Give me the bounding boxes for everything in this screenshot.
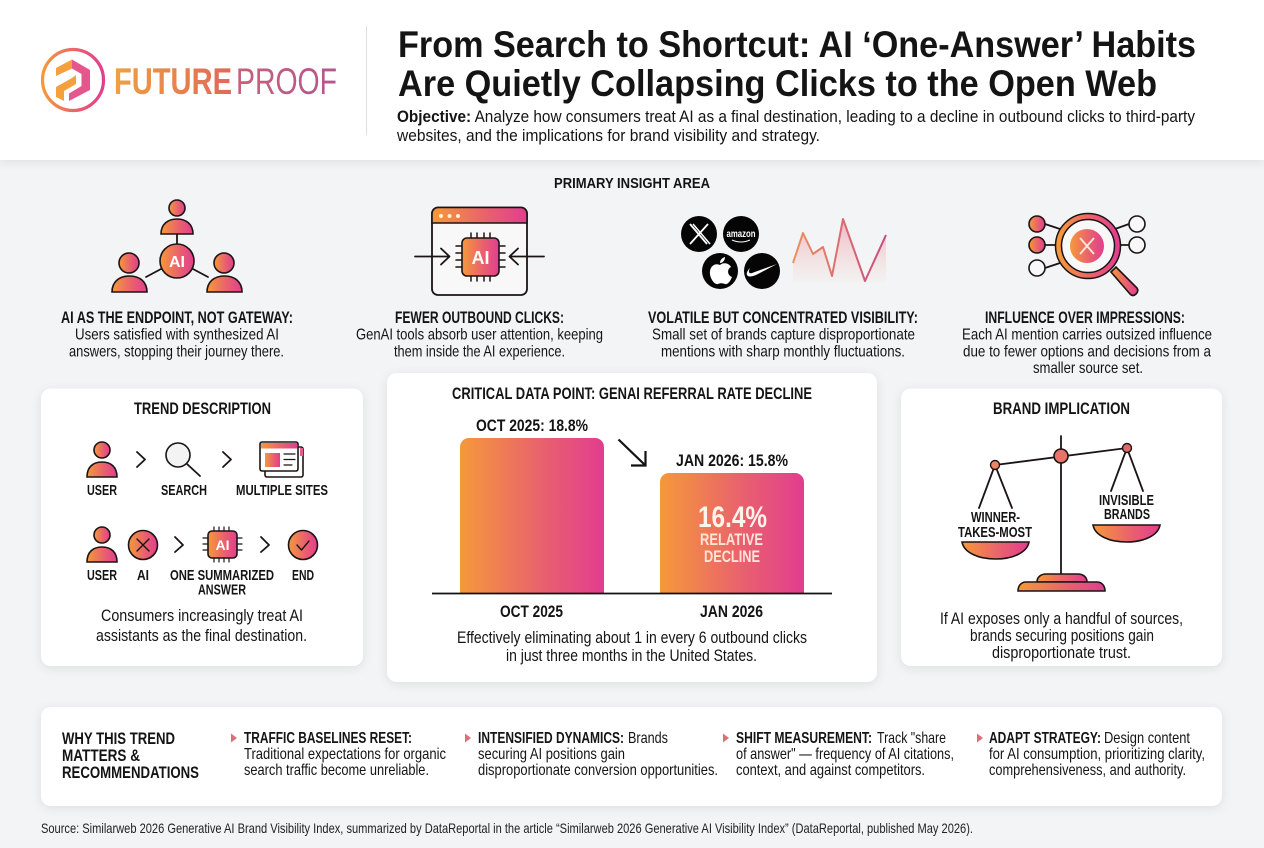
- insight 4: influence over impressions: [962, 214, 1212, 377]
- recommendation: adapt strategy: ADAPT STRATEGY:: [989, 730, 1101, 747]
- source note: Source: Similarweb 2026 Generative AI Brand Visibility Index, summarized by DataReportal in the article “Similarweb 2026 Generative AI Visibility Index” (DataReportal, published May 2026).: [41, 820, 973, 836]
- logo: FutureProof: FUTURE: [114, 61, 232, 102]
- insight 2 text: GenAI tools absorb user attention, keeping: [356, 326, 603, 344]
- panel: trend description: [41, 388, 363, 666]
- panel: why this trend matters: [41, 707, 1222, 806]
- icon: magnifier with nodes: [1029, 214, 1145, 296]
- recommendation: intensified dynamics: disproportionate conversion opportunities.: [478, 762, 718, 779]
- insight 3 text: mentions with sharp monthly fluctuations.: [661, 344, 905, 360]
- insight 3 text: [648, 309, 918, 360]
- insight 1 text: answers, stopping their journey there.: [69, 344, 284, 360]
- callout: relative decline: [698, 501, 767, 566]
- bar chart: OCT 2025: [500, 603, 563, 621]
- trend description text: Consumers increasingly treat AI: [101, 606, 303, 625]
- brand implication text: [940, 609, 1183, 662]
- panel: brand implication: [901, 388, 1222, 666]
- insight 2 text: [356, 309, 603, 360]
- insight 3 text: VOLATILE BUT CONCENTRATED VISIBILITY:: [648, 309, 918, 327]
- flow: AI one-answer: USER: [87, 567, 117, 584]
- icon: brand logos: amazon: [726, 229, 756, 240]
- callout: relative decline: 16.4%: [698, 501, 767, 534]
- section heading: primary insight area: PRIMARY INSIGHT AREA: [554, 175, 710, 192]
- chart: volatile sparkline: [793, 219, 886, 283]
- recommendation: shift measurement: SHIFT MEASUREMENT:: [736, 730, 872, 747]
- heading: why this trend matters and recommendations: MATTERS &: [62, 747, 140, 765]
- heading: critical data point: CRITICAL DATA POINT: GENAI REFERRAL RATE DECLINE: [452, 385, 812, 403]
- insight 3: volatile but concentrated visibility: [648, 216, 918, 360]
- insight 1 text: [61, 309, 293, 360]
- recommendation: traffic baselines reset: [231, 730, 446, 779]
- flow: traditional search: [87, 442, 328, 499]
- recommendation: intensified dynamics: Brands: [628, 730, 668, 747]
- heading: why this trend matters and recommendations: [62, 730, 199, 782]
- callout: relative decline: DECLINE: [704, 547, 760, 566]
- recommendation: traffic baselines reset: search traffic become unreliable.: [244, 762, 429, 779]
- heading: why this trend matters and recommendations: RECOMMENDATIONS: [62, 764, 199, 782]
- flow: traditional search: USER: [87, 482, 117, 499]
- heading: trend description: TREND DESCRIPTION: [134, 400, 271, 418]
- insight 1 text: Users satisfied with synthesized AI: [75, 326, 279, 344]
- icon: browser window with AI chip: [415, 208, 544, 295]
- recommendation: shift measurement: of answer" — frequency of AI citations,: [736, 746, 954, 763]
- icon: balance scale: TAKES-MOST: [958, 524, 1032, 541]
- recommendation: shift measurement: [723, 730, 954, 779]
- critical data text: in just three months in the United States.: [506, 646, 757, 665]
- icon: users connected to AI: AI: [169, 254, 185, 271]
- flow: traditional search: SEARCH: [161, 482, 207, 499]
- flow: AI one-answer: ANSWER: [198, 582, 246, 598]
- objective text: websites, and the implications for brand visibility and strategy.: [396, 126, 820, 145]
- insight 4 text: INFLUENCE OVER IMPRESSIONS:: [985, 309, 1185, 327]
- flow: traditional search: MULTIPLE SITES: [236, 482, 328, 499]
- bar chart: OCT 2025: 18.8%: [476, 417, 588, 435]
- recommendation: shift measurement: context, and against competitors.: [736, 762, 925, 779]
- header: [0, 0, 1264, 160]
- bar: Oct 2025: [460, 438, 604, 593]
- flow: AI one-answer: END: [292, 567, 314, 584]
- recommendation: traffic baselines reset: TRAFFIC BASELINES RESET:: [244, 730, 412, 747]
- title: [398, 24, 1196, 104]
- bar chart: [432, 417, 832, 621]
- insight 1 text: AI AS THE ENDPOINT, NOT GATEWAY:: [61, 309, 293, 327]
- icon: users connected to AI: [112, 200, 242, 292]
- critical data text: [457, 628, 807, 665]
- brand implication text: brands securing positions gain: [970, 626, 1154, 645]
- heading: why this trend matters and recommendations: WHY THIS TREND: [62, 730, 175, 748]
- insight 4 text: smaller source set.: [1033, 360, 1143, 377]
- trend description text: assistants as the final destination.: [96, 626, 307, 645]
- icon: brand logos: [681, 216, 780, 289]
- logo: FutureProof: [42, 50, 337, 110]
- icon: balance scale: WINNER-: [971, 509, 1020, 526]
- recommendation: adapt strategy: comprehensiveness, and authority.: [989, 762, 1186, 779]
- recommendation: intensified dynamics: [465, 730, 718, 779]
- insight 2 text: them inside the AI experience.: [394, 344, 565, 360]
- bar chart: JAN 2026: [700, 603, 763, 621]
- insight 4 text: due to fewer options and decisions from a: [963, 344, 1211, 360]
- title: From Search to Shortcut: AI ‘One-Answer’ Habits: [398, 24, 1196, 65]
- bar chart: JAN 2026: 15.8%: [676, 452, 788, 470]
- panel: critical data point: [387, 373, 877, 682]
- insight 4 text: [962, 309, 1212, 377]
- brand implication text: If AI exposes only a handful of sources,: [940, 609, 1183, 628]
- recommendation: intensified dynamics: securing AI positions gain: [478, 746, 625, 763]
- flow: AI one-answer: [87, 527, 318, 598]
- insight 1: AI as the endpoint: [61, 200, 293, 360]
- arrow: decline: [618, 440, 646, 466]
- recommendation: intensified dynamics: INTENSIFIED DYNAMICS:: [478, 730, 624, 747]
- insight 4 text: Each AI mention carries outsized influence: [962, 326, 1212, 344]
- insight 3 text: Small set of brands capture disproportionate: [652, 326, 915, 344]
- icon: browser window with AI chip: AI: [472, 248, 490, 268]
- insight 2 text: FEWER OUTBOUND CLICKS:: [395, 309, 564, 327]
- flow: AI one-answer: ONE SUMMARIZED: [170, 567, 274, 584]
- icon: balance scale: [958, 436, 1160, 591]
- title: Are Quietly Collapsing Clicks to the Open Web: [398, 63, 1157, 104]
- critical data text: Effectively eliminating about 1 in every 6 outbound clicks: [457, 628, 807, 647]
- recommendation: adapt strategy: for AI consumption, prioritizing clarity,: [989, 746, 1205, 763]
- brand implication text: disproportionate trust.: [992, 643, 1131, 662]
- recommendation: shift measurement: Track "share: [877, 730, 946, 747]
- callout: relative decline: RELATIVE: [700, 530, 763, 549]
- objective text: [396, 107, 1195, 145]
- icon: balance scale: INVISIBLE: [1099, 492, 1154, 509]
- objective text: Objective: Analyze how consumers treat AI as a final destination, leading to a decline in outbound clicks to third-party: [397, 107, 1195, 126]
- flow: AI one-answer: AI: [137, 567, 149, 584]
- flow: AI one-answer: AI: [216, 537, 230, 553]
- recommendation: traffic baselines reset: Traditional expectations for organic: [244, 746, 446, 763]
- icon: balance scale: BRANDS: [1104, 506, 1150, 523]
- heading: brand implication: BRAND IMPLICATION: [993, 400, 1130, 418]
- bar: Jan 2026: [660, 473, 804, 593]
- trend description text: [96, 606, 307, 645]
- recommendation: adapt strategy: Design content: [1104, 730, 1190, 747]
- recommendation: adapt strategy: [977, 730, 1205, 779]
- logo: FutureProof: PROOF: [236, 61, 337, 102]
- insight 2: fewer outbound clicks: [356, 208, 603, 360]
